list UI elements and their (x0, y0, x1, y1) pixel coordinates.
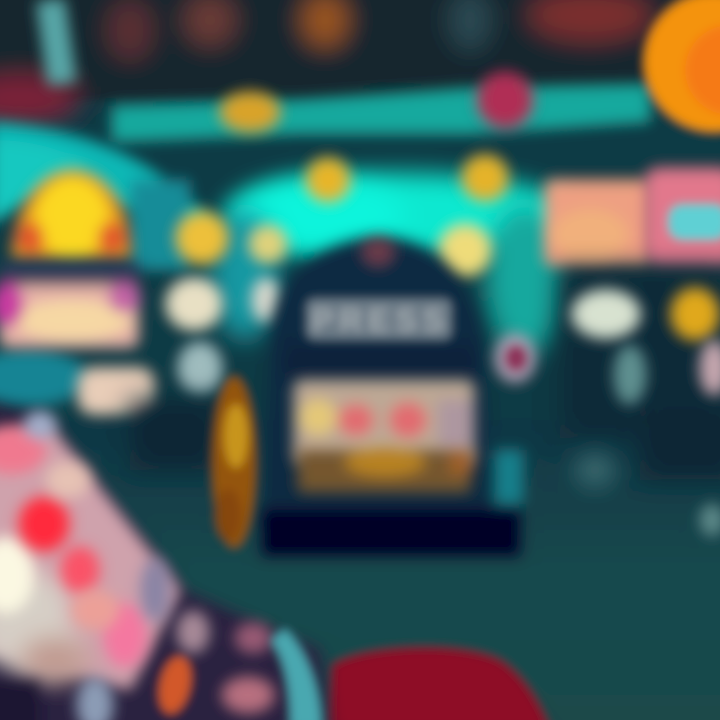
orange sun top right (644, 0, 720, 132)
left cyan arcs (0, 122, 215, 406)
foreground cards (0, 400, 332, 720)
bright cyan backlight (211, 173, 575, 355)
payout tray (298, 448, 472, 492)
card chips (153, 652, 197, 718)
left slot machine (0, 170, 154, 414)
red carpet (328, 647, 550, 720)
teal ceiling band (112, 84, 650, 142)
strip of top dark columns (37, 0, 533, 132)
dark card base (0, 400, 332, 720)
lamps and second row machines (130, 155, 508, 470)
main card (0, 425, 180, 690)
lamp: yellow dome (12, 170, 130, 258)
right slot machines (545, 168, 720, 536)
reels window (294, 380, 474, 464)
top dark venue band (0, 0, 720, 124)
cabinet (262, 236, 492, 520)
center slot machine (262, 236, 535, 556)
golden lever pillar (212, 376, 256, 548)
marquee sign: PRESS (312, 302, 444, 338)
dark base (262, 510, 520, 556)
machine screen (0, 262, 154, 414)
